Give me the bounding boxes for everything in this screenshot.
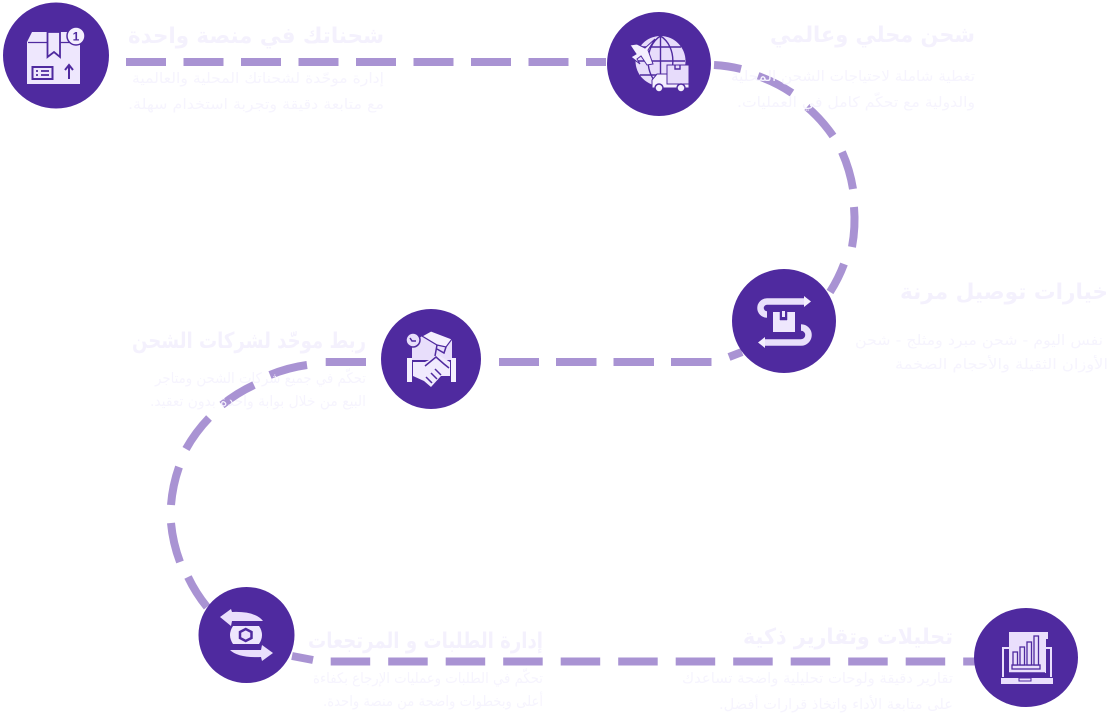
description (150, 368, 366, 410)
description: تغطية شاملة لاحتياجات الشحن المحلية (731, 69, 975, 85)
description: تحكّم في الطلبات وعمليات الإرجاع بكفاءة (313, 668, 543, 687)
description: أعلى وبخطوات واضحة من منصة واحدة. (323, 691, 543, 710)
description: الأوزان الثقيلة والأحجام الضخمة (895, 355, 1108, 373)
icon: returns arrows with hex nut (198, 587, 294, 683)
icon: handshake with packages (381, 309, 481, 409)
description: تحكّم في جميع شركات الشحن ومتاجر (154, 368, 366, 387)
title: شحناتك في منصة واحدة (128, 24, 384, 49)
icon: delivery route with box (732, 269, 836, 373)
dashed route connecting the steps (126, 62, 975, 662)
description: البيع من خلال بوابة واحدة بدون تعقيد. (150, 394, 366, 410)
description: والدولية مع تحكّم كامل في العمليات. (737, 92, 975, 111)
icon: parcel with badge: 1 (73, 30, 80, 44)
description: على متابعة الأداء واتخاذ قرارات أفضل. (719, 694, 953, 713)
icon: laptop with bar chart (974, 608, 1078, 707)
step 5: orders and returns management (308, 629, 543, 710)
step 1: shipments in one platform (128, 24, 384, 113)
description (682, 671, 953, 713)
icon: parcel with badge (3, 2, 109, 108)
description: نفس اليوم - شحن مبرد ومثلج - شحن (855, 333, 1103, 349)
description: إدارة موحّدة لشحناتك المحلية والعالمية (132, 71, 384, 87)
title: إدارة الطلبات و المرتجعات (308, 629, 543, 654)
title: تحليلات وتقارير ذكية (743, 625, 953, 650)
description (855, 333, 1108, 373)
description (313, 668, 543, 710)
step 6: analytics and smart reports (682, 625, 953, 713)
title: ربط موحّد لشركات الشحن (132, 329, 366, 354)
description (128, 71, 384, 113)
title: شحن محلي وعالمي (770, 23, 975, 48)
step 2: local and global shipping (731, 23, 975, 111)
step 3: flexible delivery options (855, 280, 1108, 373)
description: تقارير دقيقة ولوحات تحليلية واضحة تساعدك (682, 671, 953, 687)
title: خيارات توصيل مرنة (900, 280, 1108, 305)
icon: globe with plane and truck (607, 12, 711, 116)
description: مع متابعة دقيقة وتجربة استخدام سهلة. (128, 97, 384, 113)
step 4: unified carrier integration (132, 329, 366, 410)
description (731, 69, 975, 111)
